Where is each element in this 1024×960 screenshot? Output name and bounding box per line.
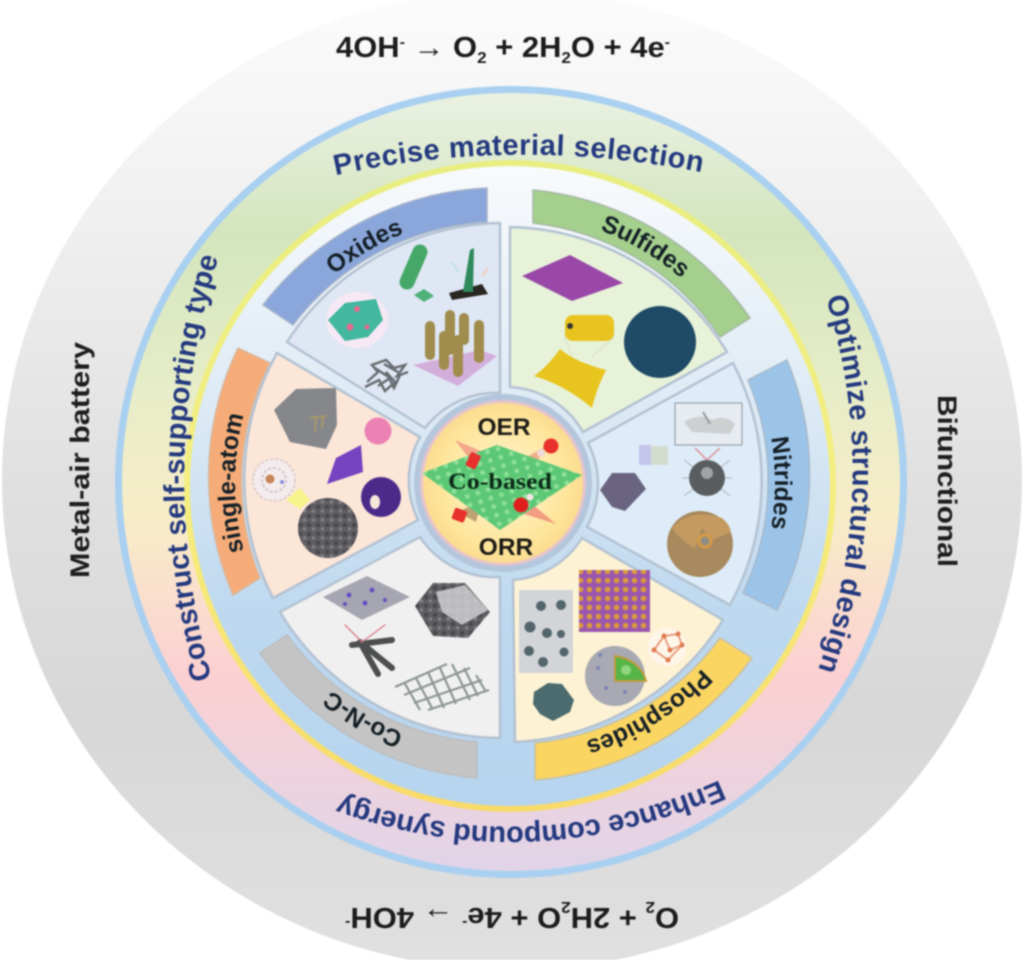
icon: gray-purple nanosheet <box>323 576 410 620</box>
icon: molecular structure <box>648 628 686 666</box>
ring: yellow divider <box>184 160 836 812</box>
ring: strategy gradient band <box>122 93 900 871</box>
catalyst: green lattice sheet <box>422 445 582 530</box>
tab: single-atom <box>209 348 270 595</box>
equation: OER reaction: + 2H <box>487 32 561 64</box>
panel: center Co-based hub <box>414 394 592 572</box>
molecule: upper-right O2 <box>537 438 558 457</box>
label: Metal-air battery: Metal-air battery <box>65 342 95 578</box>
icon: pale yellow diamond <box>286 488 310 509</box>
panel: Nitrides <box>585 358 811 611</box>
icon: porous gray slab <box>519 590 573 673</box>
arrow: upper-left red ray <box>455 440 483 470</box>
equation: OER reaction: - <box>665 34 670 51</box>
tab label: Sulfides: Sulfides <box>601 215 688 277</box>
sector: Phosphides background <box>513 538 723 742</box>
ring heading: Optimize structural design: Optimize structural design <box>818 294 872 672</box>
panel: Co-N-C <box>258 536 502 780</box>
sector: Nitrides background <box>587 363 762 605</box>
equation: OER reaction: 4OH <box>336 32 396 64</box>
icon: purple orange lattice <box>579 570 650 632</box>
tab: Nitrides <box>743 360 810 610</box>
equation: ORR reaction: 2 <box>561 898 571 915</box>
arrow: upper-right red ray <box>518 445 548 472</box>
panel: single-atom <box>207 346 422 600</box>
icon: framed structure inset <box>675 403 742 445</box>
panel: inner blue disc <box>190 166 830 806</box>
icon: branched dark nanostructure <box>345 625 392 674</box>
sector: Co-N-C background <box>280 537 500 738</box>
equation: OER reaction: 2 <box>561 50 571 67</box>
icon: nanopillar array <box>413 315 497 386</box>
sector: single-atom background <box>244 353 420 598</box>
icon: brown hollow sphere <box>667 511 733 577</box>
label: Co-based: Co-based <box>448 469 552 494</box>
tab: Co-N-C <box>260 635 477 778</box>
hub: outer ring <box>414 394 592 572</box>
equation: ORR reaction: - <box>462 914 467 931</box>
tab: Sulfides <box>533 190 750 337</box>
sector: Oxides background <box>287 223 500 428</box>
tab: Phosphides <box>535 638 752 780</box>
arrow: lower-right red ray <box>518 498 556 524</box>
equation: OER reaction: 2 <box>477 50 487 67</box>
label: Bifunctional: Bifunctional <box>932 395 962 567</box>
molecule: lower-left red <box>451 507 468 523</box>
icon: needle on dark substrate <box>449 248 488 300</box>
equation: ORR reaction: O <box>656 901 679 933</box>
tab label: Nitrides: Nitrides <box>770 436 794 530</box>
tab label: Phosphides: Phosphides <box>586 669 714 754</box>
icon: porous framework mesh <box>395 664 489 710</box>
icon: purple nanosheet <box>522 255 623 301</box>
icon: spiky dark sphere <box>682 448 732 496</box>
icon: dark purple sphere <box>361 477 401 517</box>
icon: dark blue sphere <box>624 306 696 378</box>
equation: ORR reaction: O + 4e <box>467 901 561 933</box>
panel: Sulfides <box>508 188 752 434</box>
equation: ORR reaction: 2 <box>645 898 655 915</box>
tab label: Co-N-C: Co-N-C <box>323 692 402 748</box>
equation: OER reaction: - <box>400 34 405 51</box>
tab label: Oxides: Oxides <box>326 222 403 272</box>
arrow: lower-left red ray <box>458 500 482 522</box>
icon: green nanorod <box>407 252 420 282</box>
icon: lilac and gray squares <box>639 445 668 465</box>
sector: Sulfides background <box>510 227 727 432</box>
equation: ORR reaction: + 2H <box>571 901 645 933</box>
ring: blue outline <box>115 86 907 878</box>
equation: ORR reaction: → 4OH <box>350 901 462 933</box>
icon: green flake <box>414 289 434 302</box>
icon: gray sphere with green core <box>585 646 646 706</box>
ring heading: Precise material selection: Precise material selection <box>332 132 704 176</box>
icon: purple rhombus <box>327 445 363 484</box>
icon: dark teal blob <box>533 683 574 721</box>
icon: dark polyhedron <box>600 473 646 511</box>
icon: yellow nanotube <box>564 315 614 356</box>
ring heading: Enhance compound synergy: Enhance compound synergy <box>335 780 726 846</box>
label: OER: OER <box>477 414 531 441</box>
icon: gray network scribble <box>365 360 408 391</box>
equation: OER reaction: O + 4e <box>571 32 665 64</box>
label: ORR: ORR <box>479 534 534 561</box>
ring heading: Construct self-supporting type: Construct self-supporting type <box>162 254 218 682</box>
icon: gray hexagon <box>274 388 337 449</box>
equation: OER reaction: → O <box>405 32 477 64</box>
molecule: upper-left red <box>465 452 481 470</box>
hub: core fill <box>423 403 583 563</box>
molecule: lower-right O2 <box>514 494 534 512</box>
icon: teal polyhedron <box>326 292 388 348</box>
icon: pink particle <box>364 418 392 444</box>
hub: inner pink rim <box>420 400 586 566</box>
equation: ORR reaction: - <box>345 914 350 931</box>
icon: yellow sheet <box>534 349 606 408</box>
tab: Oxides <box>263 188 487 325</box>
panel: Phosphides <box>512 536 754 782</box>
panel: Oxides <box>262 186 502 430</box>
tab label: single-atom: single-atom <box>216 413 244 553</box>
icon: dark textured sphere <box>298 498 358 558</box>
icon: atomic graphene disc <box>253 459 295 501</box>
icon: gray polyhedron <box>415 583 490 638</box>
